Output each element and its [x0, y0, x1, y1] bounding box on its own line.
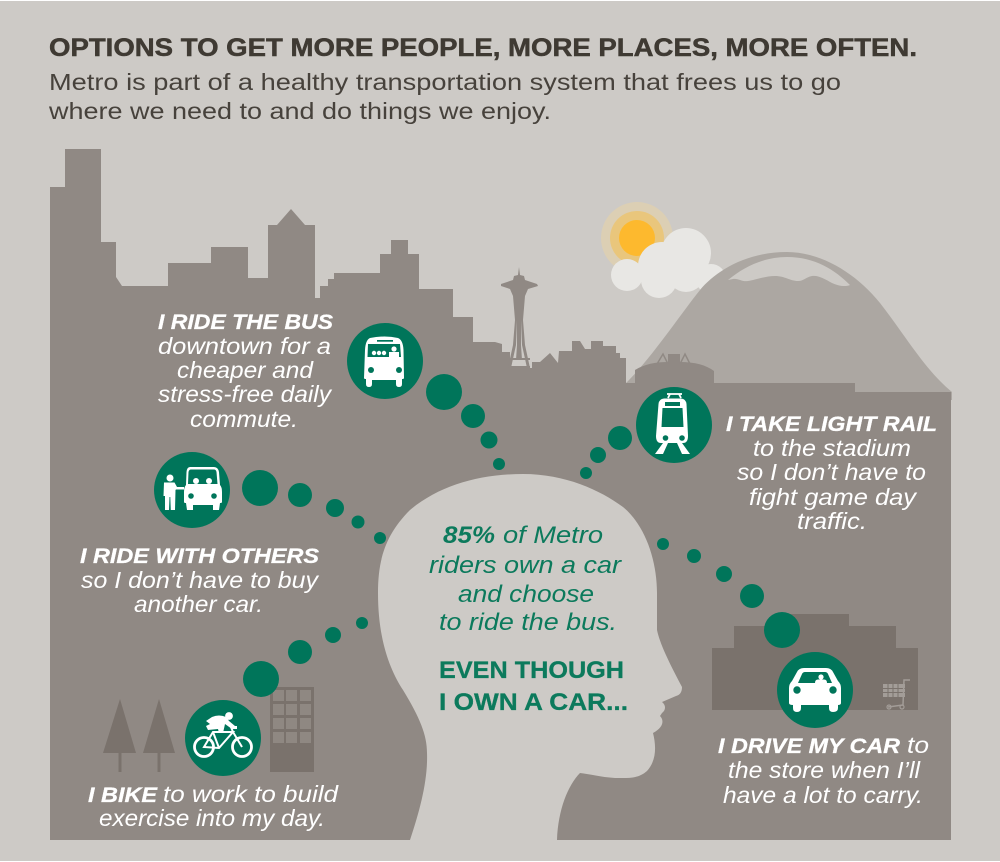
icon: car [777, 652, 853, 728]
icon: space needle [501, 267, 538, 369]
text: 85 percent of riders own a car: to ride the bus. [439, 609, 617, 636]
text: ride the bus: commute. [190, 406, 298, 432]
text: even though I own a car [439, 657, 628, 716]
text: ride with others: so I don’t have to buy [81, 567, 320, 593]
subtitle: Metro is part of a healthy transportation system that frees us to go [49, 69, 841, 95]
icon: sun [601, 202, 673, 274]
text: even though I own a car: EVEN THOUGH [439, 657, 624, 684]
text: 85 percent of riders own a car: 85% [443, 522, 495, 549]
text: ride the bus: cheaper and [177, 357, 314, 383]
text: bike: I BIKE [88, 784, 158, 807]
subtitle [48, 69, 841, 124]
text: ride with others [80, 545, 320, 617]
title: OPTIONS TO GET MORE PEOPLE, MORE PLACES, MORE OFTEN. [49, 34, 917, 62]
stadium arches [657, 354, 690, 364]
icon: store building [712, 614, 918, 710]
icon: shopping cart [883, 680, 910, 709]
text: light rail: to the stadium [753, 435, 911, 461]
text: ride with others: another car. [134, 591, 263, 617]
thought dots: bike [243, 617, 368, 697]
icon: carpool [154, 452, 230, 528]
text: bike: to work to build [163, 781, 339, 807]
icon: bike [185, 700, 261, 776]
text: drive my car: the store when I’ll [728, 757, 921, 783]
text: light rail [726, 413, 937, 534]
text: light rail: fight game day [749, 484, 918, 510]
mountain [625, 252, 952, 400]
thought dots: light rail [580, 426, 632, 479]
text: 85 percent of riders own a car: and choose [458, 581, 594, 608]
text: ride the bus: downtown for a [158, 333, 331, 359]
text: light rail: traffic. [797, 508, 867, 534]
icon: trees [103, 699, 175, 772]
text: light rail: so I don’t have to [737, 459, 926, 485]
text: light rail: I TAKE LIGHT RAIL [726, 413, 937, 436]
bottom band [0, 840, 1000, 861]
icon: light rail [636, 387, 712, 463]
text: drive my car: have a lot to carry. [723, 782, 923, 808]
thought dots: car [657, 538, 800, 648]
subtitle: where we need to and do things we enjoy. [48, 98, 551, 124]
text: ride with others: I RIDE WITH OTHERS [80, 545, 319, 568]
text: bike: exercise into my day. [99, 805, 325, 831]
text: bike [88, 781, 339, 831]
icon: bus [347, 323, 423, 399]
text: ride the bus: stress-free daily [158, 381, 333, 407]
head silhouette [378, 474, 682, 840]
city skyline and ground [50, 149, 951, 840]
text: drive my car: to [907, 732, 929, 758]
text: even though I own a car: I OWN A CAR... [439, 689, 628, 716]
text: drive my car: I DRIVE MY CAR [718, 735, 901, 758]
thought dots: bus [426, 374, 505, 470]
thought dots: carpool [242, 470, 386, 544]
text: 85 percent of riders own a car: of Metro [503, 522, 603, 549]
text: 85 percent of riders own a car [429, 522, 622, 636]
icon: office building [270, 687, 314, 772]
text: 85 percent of riders own a car: riders own a car [429, 552, 622, 579]
icon: cloud [611, 228, 726, 298]
text: ride the bus: I RIDE THE BUS [158, 311, 333, 334]
text: ride the bus [158, 311, 333, 432]
text: drive my car [718, 732, 929, 808]
